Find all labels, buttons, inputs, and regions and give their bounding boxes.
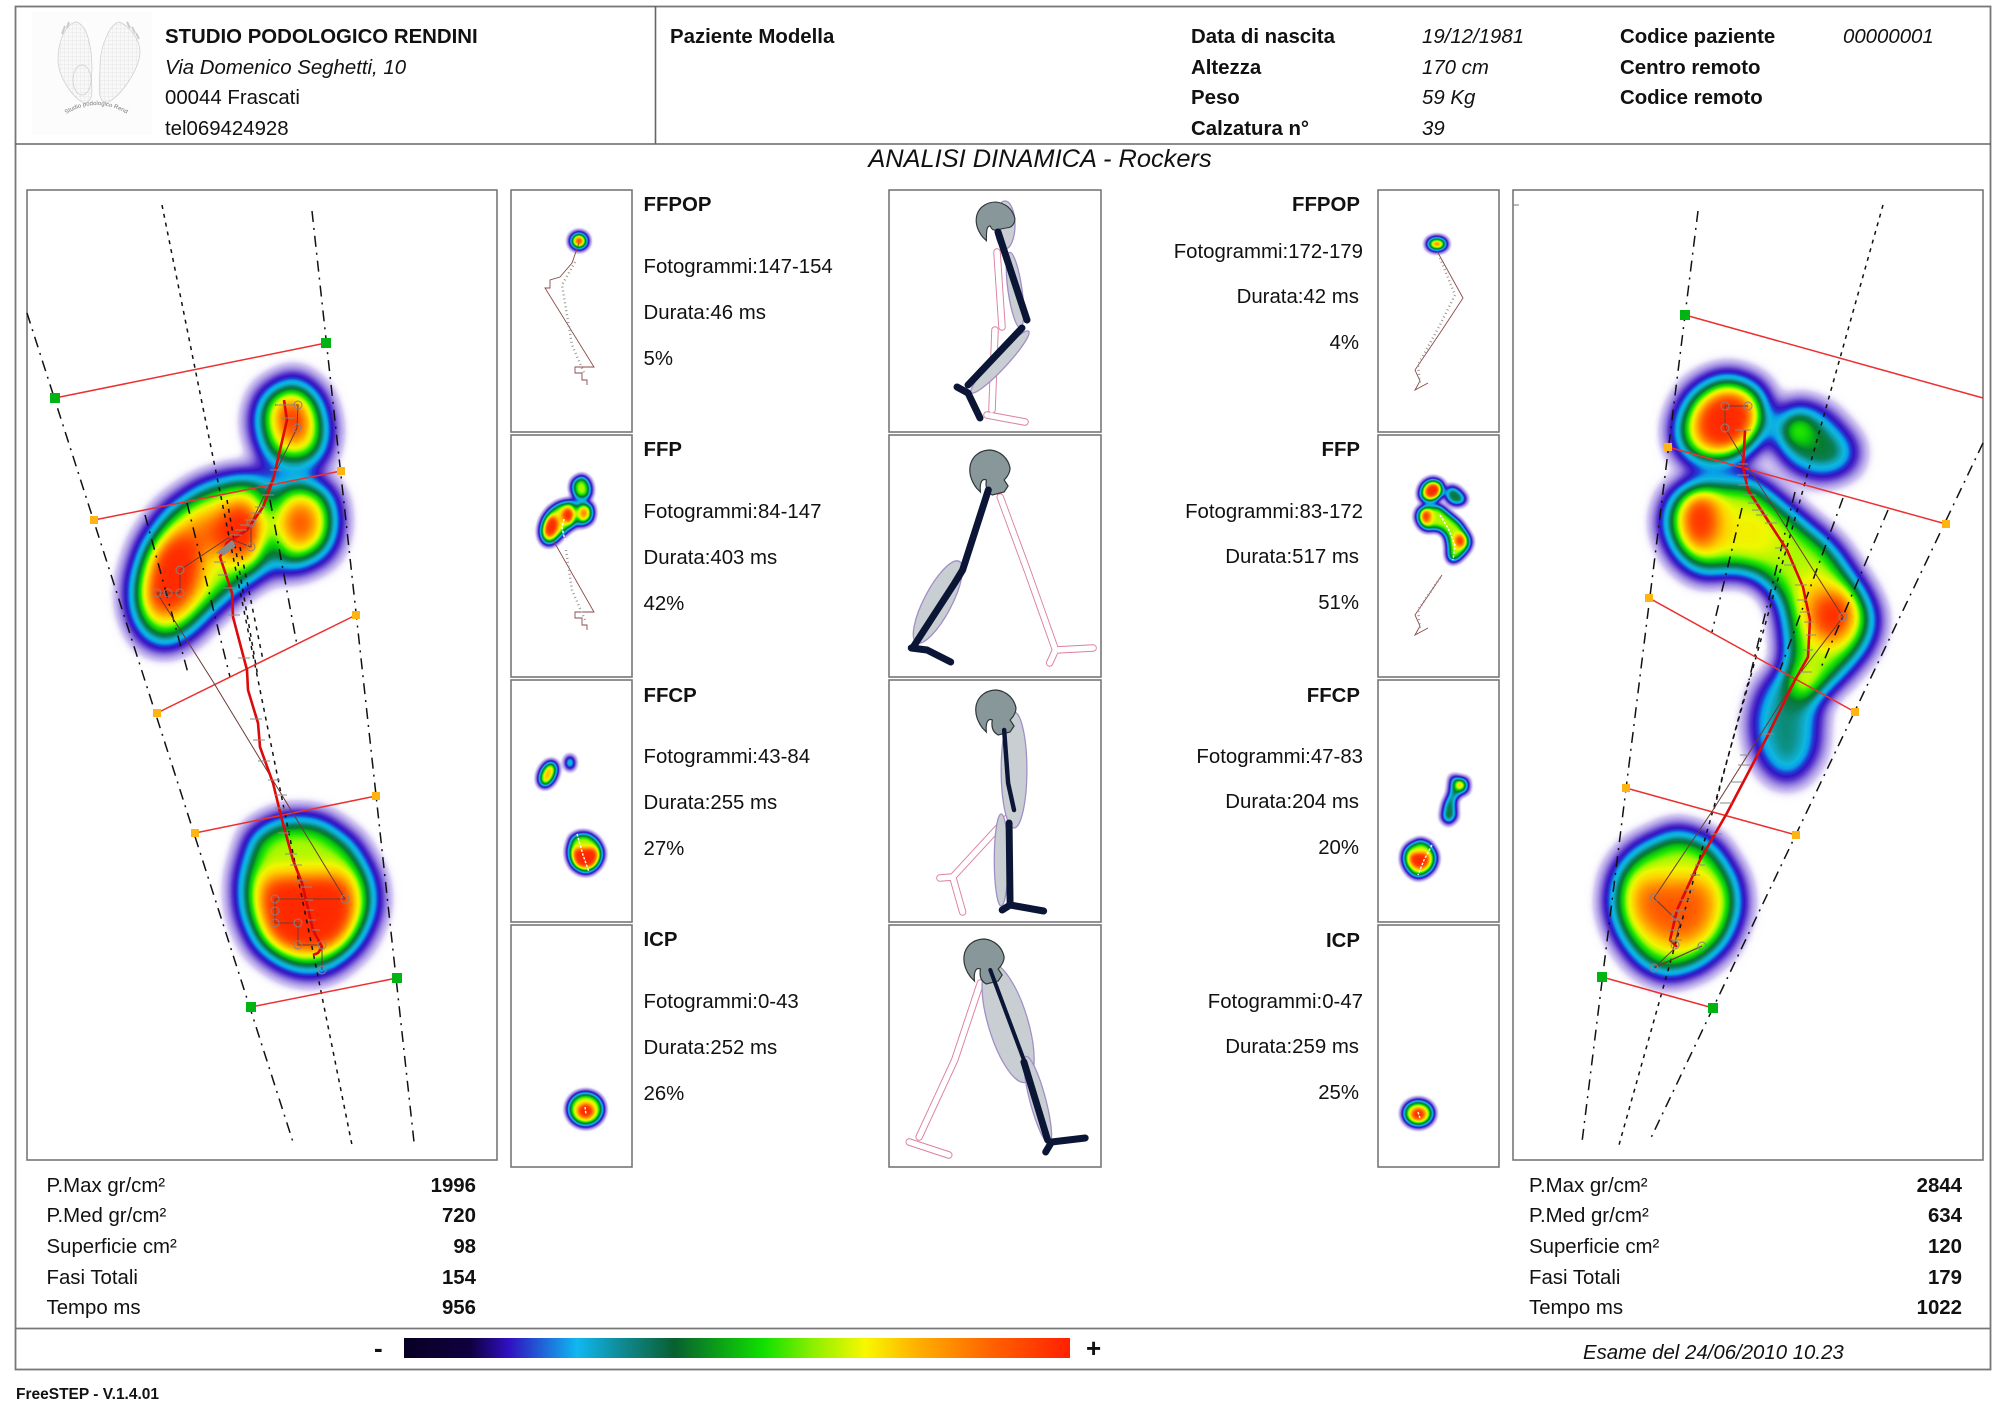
- figure: leg at heel strike: [909, 939, 1085, 1155]
- heat map: forefoot: [1417, 479, 1471, 562]
- stats: left foot: 956: [442, 1297, 476, 1319]
- right phase text: FFCP: Durata:204 ms: [1225, 791, 1359, 813]
- heat map: heel: [568, 1093, 603, 1126]
- heat map: lateral forefoot and heel: [1403, 776, 1468, 878]
- heat map: toe: [1428, 238, 1446, 250]
- panel: left FFP thumbnail: [511, 435, 632, 677]
- right phase text: ICP: Fotogrammi:0-47: [1208, 991, 1363, 1013]
- patient details: 00000001: [1843, 26, 1934, 48]
- studio details: STUDIO PODOLOGICO RENDINI: [165, 26, 478, 48]
- header band: [15, 6, 1991, 145]
- figure: leg in mid stance: [940, 690, 1044, 912]
- left phase text: FFP: Durata:403 ms: [644, 547, 777, 569]
- right phase text: FFP: 51%: [1318, 592, 1359, 614]
- patient details: Codice remoto: [1620, 87, 1763, 109]
- left phase text: FFCP: FFCP: [644, 685, 697, 707]
- studio details: [165, 26, 478, 140]
- patient name: Paziente Modella: [670, 26, 835, 48]
- left phase text: FFPOP: 5%: [644, 348, 673, 370]
- left phase text: FFP: [644, 439, 821, 615]
- right phase text: ICP: 25%: [1318, 1082, 1359, 1104]
- left phase text: ICP: 26%: [644, 1083, 684, 1105]
- patient details: 170 cm: [1422, 57, 1489, 79]
- right phase text: ICP: Durata:259 ms: [1225, 1036, 1359, 1058]
- trace: [553, 519, 594, 630]
- stats: right foot: Tempo ms: [1529, 1297, 1623, 1319]
- legend: pressure colour scale: -: [374, 1333, 383, 1363]
- stats: left foot: 720: [442, 1205, 476, 1227]
- panel: right FFCP thumbnail: [1378, 680, 1499, 922]
- trace: [1418, 1112, 1420, 1118]
- stats: right foot: Fasi Totali: [1529, 1267, 1620, 1289]
- stats: right foot: 120: [1928, 1236, 1962, 1258]
- right phase text: FFCP: Fotogrammi:47-83: [1196, 746, 1363, 768]
- left phase text: FFCP: Durata:255 ms: [644, 792, 777, 814]
- software version: FreeSTEP - V.1.4.01: [16, 1386, 159, 1403]
- right phase text: FFCP: 20%: [1318, 837, 1359, 859]
- rocker zone lines: right foot: [1597, 310, 1983, 1013]
- stats: left foot: 154: [442, 1267, 477, 1289]
- guide lines: left foot: [27, 205, 414, 1145]
- panel: left foot pressure map: [27, 190, 497, 1160]
- stats: left foot: Tempo ms: [46, 1297, 141, 1319]
- patient details: Altezza: [1191, 57, 1262, 79]
- left phase text: FFCP: Fotogrammi:43-84: [644, 746, 810, 768]
- stats: right foot: 2844: [1917, 1175, 1963, 1197]
- studio details: Via Domenico Seghetti, 10: [165, 57, 407, 79]
- panel: FFCP gait figure: [889, 680, 1101, 922]
- stats: right foot: P.Med gr/cm²: [1529, 1205, 1649, 1227]
- left phase text: FFCP: [644, 685, 810, 860]
- stats: left foot: 98: [453, 1236, 476, 1258]
- title: ANALISI DINAMICA - Rockers: [866, 145, 1212, 173]
- panel: FFP gait figure: [889, 435, 1101, 677]
- trace: [545, 243, 594, 385]
- left phase text: FFPOP: Durata:46 ms: [644, 302, 766, 324]
- left phase text: FFPOP: Fotogrammi:147-154: [644, 256, 833, 278]
- left phase text: ICP: Fotogrammi:0-43: [644, 991, 799, 1013]
- stats: right foot: Superficie cm²: [1529, 1236, 1660, 1258]
- right phase text: FFCP: [1196, 685, 1363, 859]
- panel: right FFPOP thumbnail: [1378, 190, 1499, 432]
- figure: leg in forefoot push: [904, 450, 1093, 663]
- patient details: 39: [1422, 118, 1445, 140]
- left phase text: ICP: Durata:252 ms: [644, 1037, 777, 1059]
- legend: pressure colour scale: [374, 1333, 1101, 1363]
- heat map: heel: [1403, 1101, 1433, 1126]
- stats: left foot: Fasi Totali: [46, 1267, 138, 1289]
- figure: leg in pre-swing: [957, 201, 1034, 422]
- patient details: Data di nascita: [1191, 26, 1336, 48]
- rocker zone lines: left foot: [50, 338, 402, 1012]
- heat map: toe: [571, 233, 587, 249]
- right phase text: FFP: Durata:517 ms: [1225, 546, 1359, 568]
- heat map: forefoot and heel: [536, 757, 603, 873]
- heat map: forefoot: [541, 476, 593, 545]
- patient details: Peso: [1191, 87, 1240, 109]
- trace: [1415, 515, 1455, 635]
- studio details: 00044 Frascati: [165, 87, 300, 109]
- panel: ICP gait figure: [889, 925, 1101, 1167]
- stats: left foot: [46, 1175, 477, 1319]
- exam date: Esame del 24/06/2010 10.23: [1583, 1342, 1844, 1364]
- right phase text: ICP: ICP: [1326, 930, 1360, 952]
- right phase text: FFP: [1185, 439, 1363, 614]
- stats: right foot: P.Max gr/cm²: [1529, 1175, 1648, 1197]
- trace: [585, 1107, 586, 1114]
- stats: left foot: 1996: [431, 1175, 476, 1197]
- left phase text: FFPOP: [644, 194, 833, 370]
- panel: right FFP thumbnail: [1378, 435, 1499, 677]
- stats: right foot: [1529, 1175, 1963, 1319]
- stats: left foot: Superficie cm²: [46, 1236, 177, 1258]
- patient details: Centro remoto: [1620, 57, 1760, 79]
- right phase text: FFPOP: Fotogrammi:172-179: [1174, 241, 1363, 263]
- stats: right foot: 1022: [1917, 1297, 1962, 1319]
- right phase text: FFPOP: FFPOP: [1292, 194, 1360, 216]
- right phase text: ICP: [1208, 930, 1363, 1104]
- patient details: 59 Kg: [1422, 87, 1476, 109]
- panel: right foot pressure map: [1513, 190, 1983, 1160]
- left phase text: ICP: ICP: [644, 929, 678, 951]
- stats: left foot: P.Max gr/cm²: [46, 1175, 165, 1197]
- footer band: [15, 1328, 1991, 1364]
- left phase text: FFCP: 27%: [644, 838, 684, 860]
- centre of pressure path: right foot: [1650, 402, 1847, 972]
- right phase text: FFPOP: [1174, 194, 1363, 354]
- panel: left FFCP thumbnail: [511, 680, 632, 922]
- icon: studio logo with two feet: [58, 22, 140, 114]
- left phase text: ICP: [644, 929, 799, 1105]
- panel: left ICP thumbnail: [511, 925, 632, 1167]
- studio details: tel069424928: [165, 118, 289, 140]
- left phase text: FFP: FFP: [644, 439, 682, 461]
- panel: right ICP thumbnail: [1378, 925, 1499, 1167]
- right phase text: FFP: FFP: [1321, 439, 1360, 461]
- patient details: 19/12/1981: [1422, 26, 1524, 48]
- stats: left foot: P.Med gr/cm²: [46, 1205, 166, 1227]
- right phase text: FFP: Fotogrammi:83-172: [1185, 501, 1363, 523]
- legend: pressure colour scale: +: [1086, 1333, 1101, 1363]
- stats: right foot: 179: [1928, 1267, 1962, 1289]
- patient details: [1191, 26, 1934, 140]
- patient details: Calzatura n°: [1191, 118, 1309, 140]
- panel: FFPOP gait figure: [889, 190, 1101, 432]
- patient details: Codice paziente: [1620, 26, 1775, 48]
- right phase text: FFPOP: Durata:42 ms: [1237, 286, 1359, 308]
- heat map: right foot: [1610, 375, 1875, 977]
- left phase text: FFPOP: FFPOP: [644, 194, 711, 216]
- heat map: left foot: [132, 377, 375, 973]
- right phase text: FFCP: FFCP: [1307, 685, 1360, 707]
- trace: [1415, 251, 1463, 390]
- guide lines: right foot: [1582, 205, 1983, 1145]
- centre of pressure path: left foot: [153, 400, 349, 974]
- panel: left FFPOP thumbnail: [511, 190, 632, 432]
- stats: right foot: 634: [1928, 1205, 1963, 1227]
- right phase text: FFPOP: 4%: [1330, 332, 1359, 354]
- left phase text: FFP: 42%: [644, 593, 684, 615]
- trace: [1418, 845, 1432, 875]
- left phase text: FFP: Fotogrammi:84-147: [644, 501, 821, 523]
- trace: [577, 834, 589, 872]
